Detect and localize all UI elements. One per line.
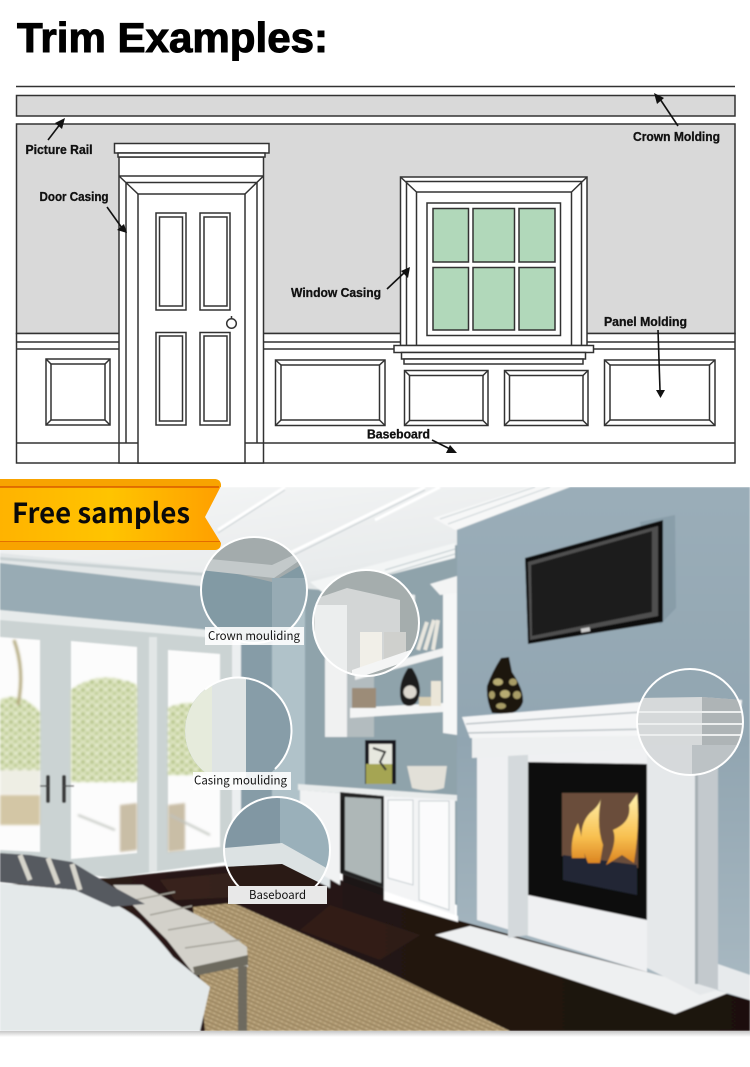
- caption: baseboard: [228, 886, 327, 904]
- arrow: baseboard: [432, 440, 457, 453]
- photo shadow: [0, 1031, 750, 1037]
- caption: crown: Crown mouliding: [208, 627, 300, 644]
- arrow: panel molding: [656, 330, 665, 398]
- lower wall wainscot: [16, 334, 735, 463]
- zoom lens: mantel: [638, 696, 742, 774]
- left wall: [0, 560, 272, 860]
- vase: [487, 657, 523, 714]
- free samples banner: Free samples: [12, 492, 190, 532]
- wine fridge: [340, 792, 384, 888]
- bench: [113, 885, 248, 1031]
- upper wall: [16, 124, 735, 334]
- left crown: [0, 553, 322, 590]
- flames: [572, 794, 638, 865]
- free samples banner: [0, 479, 221, 550]
- diagram labels: Picture Rail: [26, 143, 92, 157]
- alcove crown: [310, 543, 455, 592]
- alcove wall: [305, 545, 457, 905]
- diagram labels: Window Casing: [291, 286, 381, 300]
- diagram labels: Door Casing: [40, 190, 108, 204]
- right crown molding: [433, 487, 570, 530]
- caption: baseboard: Baseboard: [249, 886, 306, 903]
- diagram arrows: [48, 93, 678, 453]
- ceiling line: [16, 86, 735, 88]
- diagram labels: Baseboard: [367, 428, 430, 442]
- built-in cabinetry: [298, 576, 458, 922]
- fireplace mantel surround: [435, 697, 742, 1014]
- window and casing: [394, 177, 594, 364]
- right base cabinet: [384, 796, 455, 918]
- right baseboard: [718, 964, 750, 1000]
- arrow: door casing: [107, 207, 127, 233]
- left base cabinet: [300, 790, 340, 885]
- door and casing: [114, 144, 269, 463]
- crown molding band: [16, 96, 735, 116]
- right wall: [457, 487, 750, 1000]
- firebox: [528, 762, 647, 920]
- diagram labels: Crown Molding: [633, 130, 720, 144]
- arrow: picture rail: [48, 118, 65, 140]
- rug: [193, 903, 510, 1031]
- cabinet base trim: [384, 891, 458, 922]
- bowl: [407, 766, 447, 790]
- lens outlines: [201, 537, 743, 903]
- framed picture: [365, 740, 396, 784]
- throw blanket: [0, 853, 145, 907]
- bed and duvet: [0, 883, 210, 1031]
- floor: [0, 866, 750, 1031]
- chair rail: [16, 342, 735, 443]
- diagram labels: Panel Molding: [604, 315, 687, 329]
- wainscot panels: [46, 359, 715, 426]
- corner wall: [271, 606, 306, 802]
- french doors: [0, 610, 241, 878]
- caption: casing: Casing mouliding: [194, 772, 287, 788]
- ceiling: [0, 487, 527, 582]
- arrow: window casing: [387, 267, 410, 289]
- zoom lens: casing: [185, 678, 291, 784]
- zoom lens: cabinet: [314, 571, 418, 675]
- arrow: crown molding: [654, 93, 678, 126]
- title: Trim Examples:: [17, 14, 328, 61]
- zoom lens: crown: [202, 538, 306, 640]
- room photograph: [0, 487, 750, 1031]
- diagram labels: [26, 130, 720, 442]
- left baseboard: [319, 876, 332, 889]
- counter: [298, 784, 457, 801]
- trim elevation diagram: [16, 86, 735, 463]
- zoom lens: baseboard: [225, 798, 329, 886]
- television: [525, 515, 676, 644]
